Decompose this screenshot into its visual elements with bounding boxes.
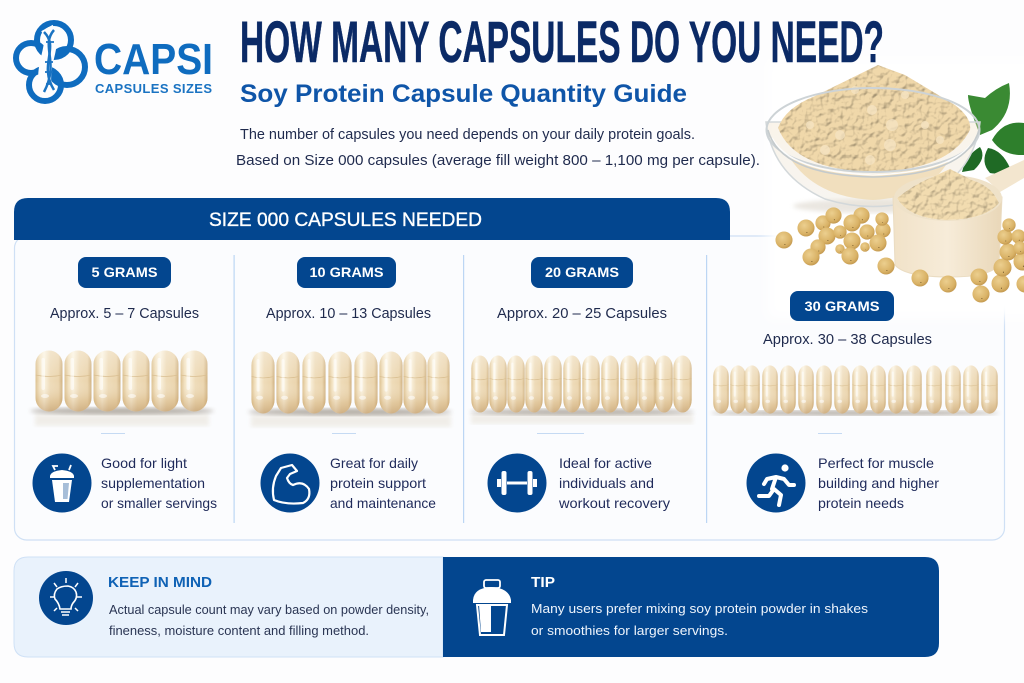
panel: keep in mind [14, 557, 443, 657]
pill: 20 grams: 20 GRAMS [545, 264, 619, 280]
benefit text [330, 455, 436, 511]
benefit text: building and higher [818, 475, 939, 491]
body text: Many users prefer mixing soy protein powder in shakes [531, 601, 869, 616]
body text [109, 602, 429, 638]
capsule row: 6 capsules [30, 350, 214, 426]
logo [16, 23, 213, 101]
column: 30 grams [711, 291, 999, 512]
benefit text [558, 455, 670, 511]
capsule estimate: Approx. 5 – 7 Capsules [50, 306, 199, 322]
benefit text: and maintenance [330, 495, 436, 511]
heading: KEEP IN MIND [108, 575, 212, 591]
pill: 10 grams: 10 GRAMS [310, 264, 384, 280]
pill: 10 grams [297, 257, 396, 288]
column: 10 grams [248, 257, 452, 512]
leaves [962, 83, 1024, 173]
body text: or smoothies for larger servings. [531, 623, 728, 638]
icon: flexed arm [260, 454, 320, 512]
benefit text [818, 455, 939, 511]
pill: 5 grams [78, 257, 171, 288]
benefit text: Good for light [101, 455, 187, 471]
column: 20 grams [470, 257, 694, 512]
icon: protein shaker [473, 580, 511, 635]
capsule estimate: Approx. 10 – 13 Capsules [266, 306, 431, 322]
benefit text [101, 455, 217, 511]
column: 5 grams [30, 257, 217, 512]
benefit text: individuals and [559, 475, 654, 491]
body text [531, 601, 869, 638]
intro text: The number of capsules you need depends on your daily protein goals. [240, 126, 695, 143]
body text: Actual capsule count may vary based on powder density, [109, 602, 429, 617]
benefit text: protein support [330, 475, 426, 491]
benefit text: Ideal for active [559, 455, 652, 471]
pill: 30 grams: 30 GRAMS [804, 298, 880, 314]
capsule row: 8 capsules [248, 352, 452, 427]
heading: TIP [531, 575, 555, 591]
photo: soy powder bowl, scoop and beans [766, 60, 1024, 318]
panel: tip [443, 557, 939, 657]
capsule estimate: Approx. 30 – 38 Capsules [763, 332, 932, 348]
capsule row: 16 capsules [711, 365, 999, 416]
soybeans [775, 207, 1024, 303]
logo tagline: CAPSULES SIZES [95, 81, 212, 96]
benefit text: protein needs [818, 495, 904, 511]
benefit text: or smaller servings [101, 495, 217, 511]
panel header [14, 198, 730, 240]
benefit text: workout recovery [558, 495, 670, 511]
bowl [766, 65, 980, 213]
capsule estimate: Approx. 20 – 25 Capsules [497, 306, 667, 322]
intro text: Based on Size 000 capsules (average fill weight 800 – 1,100 mg per capsule). [236, 152, 760, 169]
capsule row: 12 capsules [470, 355, 694, 424]
icon: dumbbell [488, 454, 546, 512]
icon: rings with DNA helix [16, 23, 85, 101]
benefit text: supplementation [101, 475, 205, 491]
panel header: SIZE 000 CAPSULES NEEDED [209, 209, 482, 231]
benefit text: Perfect for muscle [818, 455, 934, 471]
panel: capsules needed [14, 198, 1004, 540]
logo wordmark: CAPSI [94, 35, 213, 84]
pill: 20 grams [531, 257, 633, 288]
intro text [236, 126, 760, 169]
icon: shaker cup [32, 454, 92, 512]
icon: light bulb [39, 571, 93, 625]
pill: 30 grams [790, 291, 894, 321]
scoop [893, 160, 1024, 277]
benefit text: Great for daily [330, 455, 418, 471]
pill: 5 grams: 5 GRAMS [92, 264, 158, 280]
body text: fineness, moisture content and filling method. [109, 623, 369, 638]
icon: runner [746, 454, 806, 512]
subtitle: Soy Protein Capsule Quantity Guide [240, 80, 687, 108]
